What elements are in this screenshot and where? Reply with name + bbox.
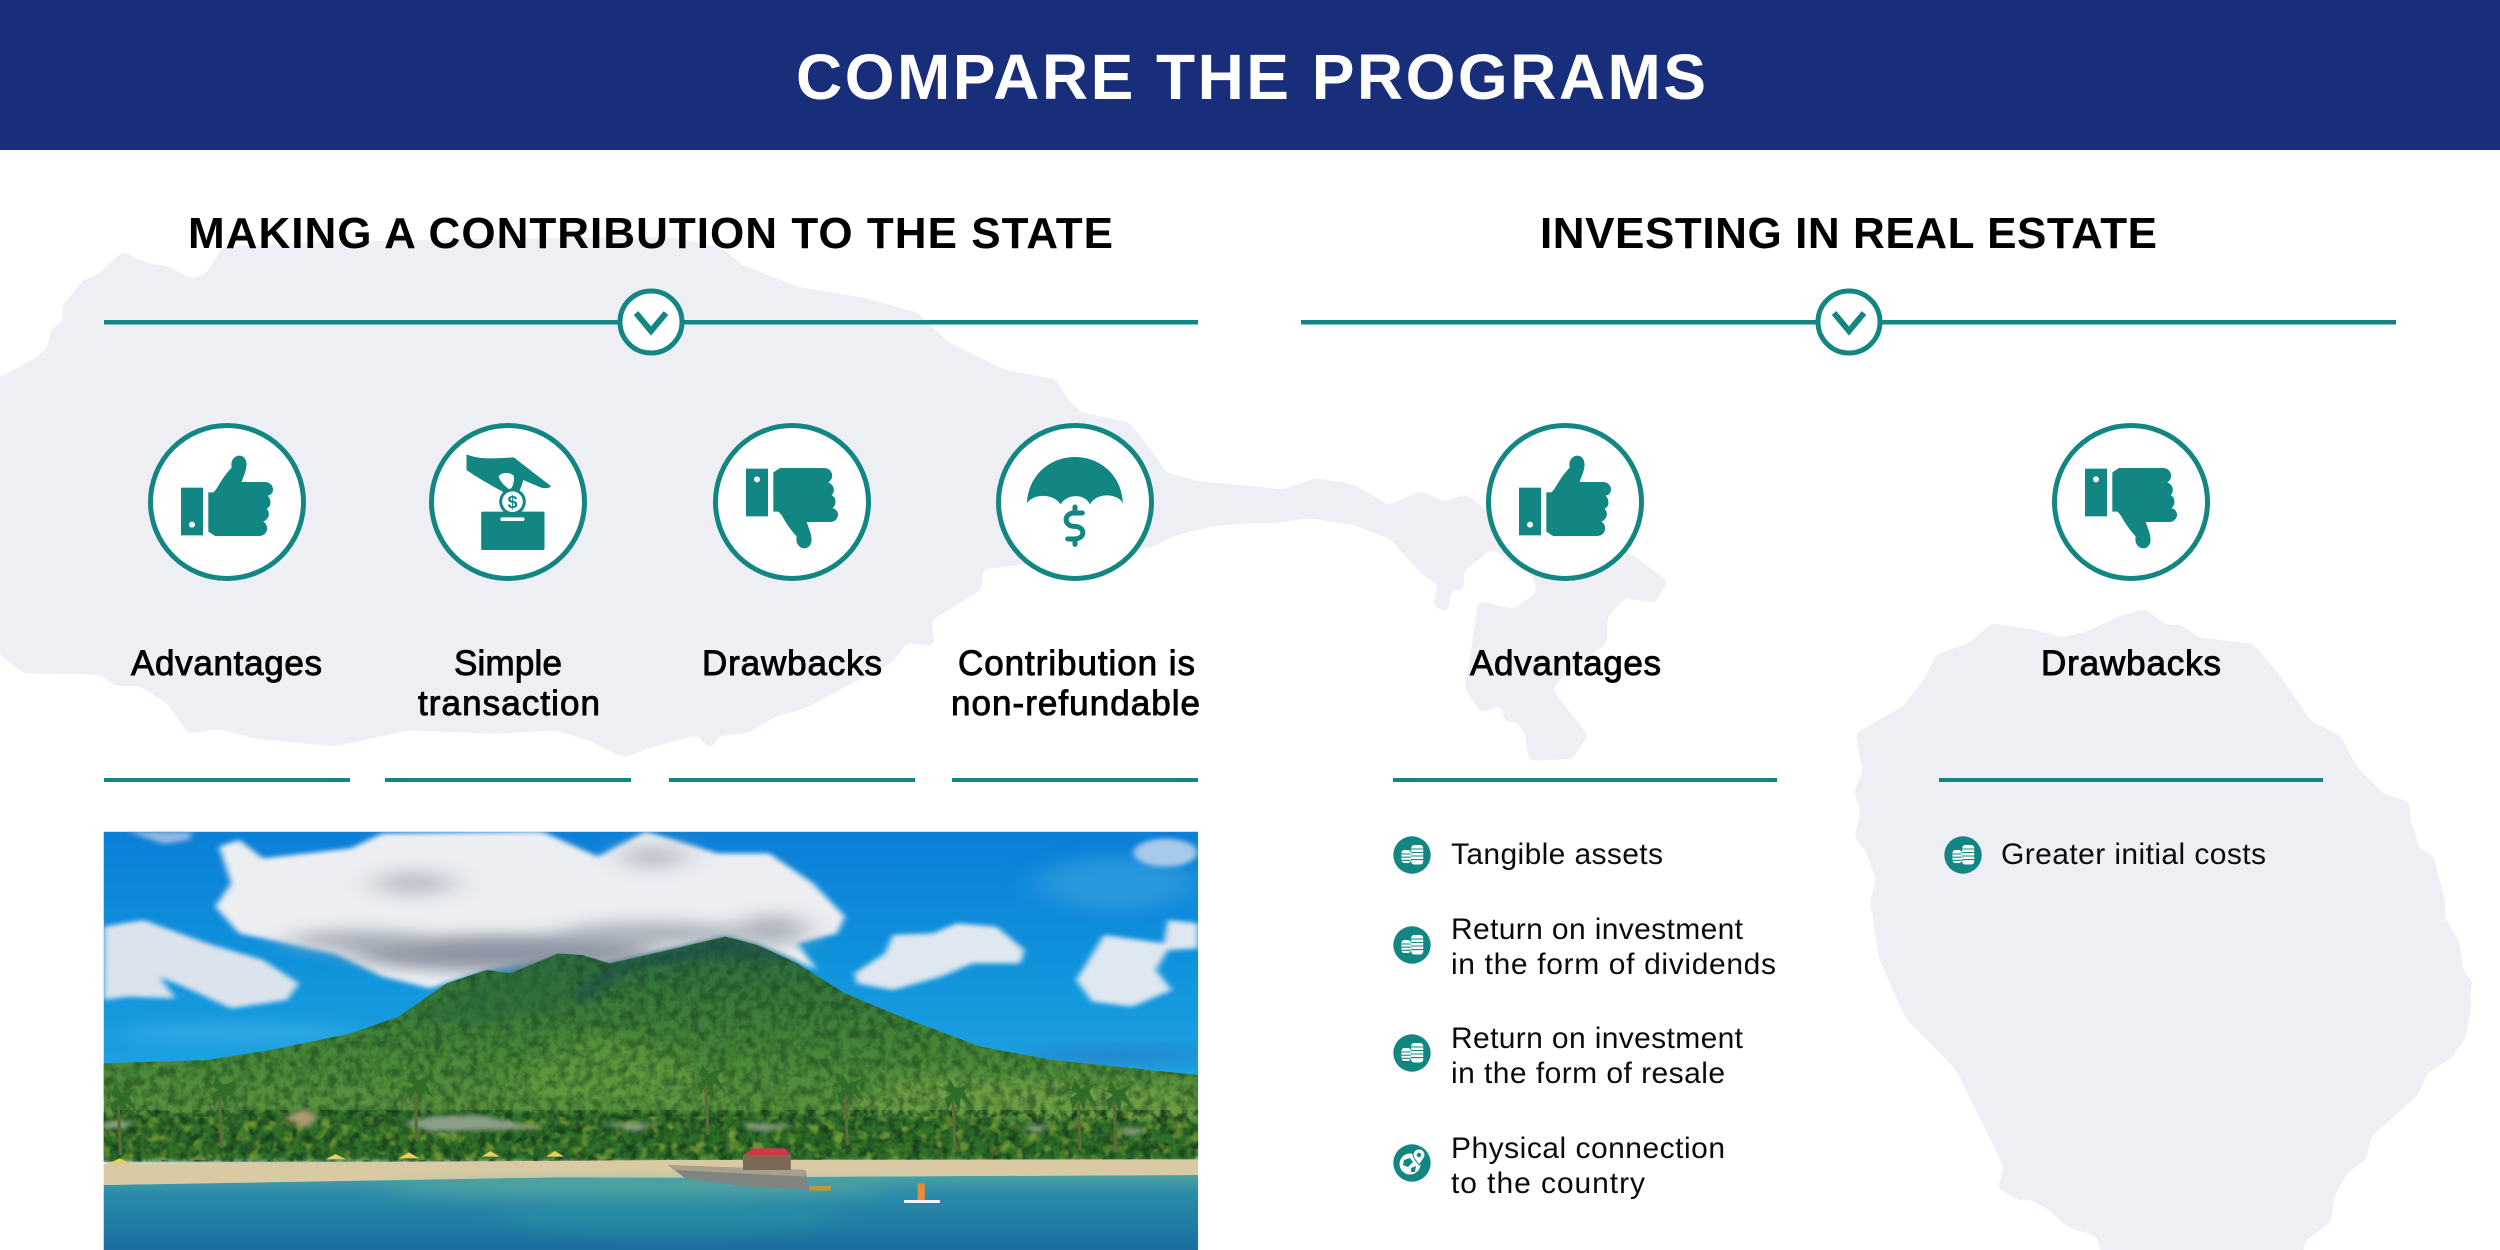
map: Nevis: [1854, 609, 2473, 1250]
label: contribution is non-refundable: Contribution is: [958, 644, 1195, 683]
label: advantages: Advantages: [131, 644, 322, 683]
item: physical connection: [1393, 1132, 1725, 1200]
item: tangible assets: Tangible assets: [1451, 838, 1663, 871]
item: return as resale: [1393, 1022, 1744, 1090]
item: return as dividends: [1393, 913, 1776, 981]
column underlines: [104, 778, 1198, 782]
item: return as dividends: Return on investment: [1451, 913, 1744, 946]
item: return as dividends: in the form of dividends: [1451, 948, 1776, 981]
item: return as resale: in the form of resale: [1451, 1057, 1725, 1090]
header banner: [0, 0, 2500, 150]
icon: umbrella over dollar: [998, 426, 1152, 578]
heading: contribution: MAKING A CONTRIBUTION TO THE STATE: [188, 209, 1113, 258]
panel: making a contribution to the state: [99, 209, 1212, 1250]
icon: hand dropping coin in box: $: [507, 492, 518, 512]
label: advantages: Advantages: [1470, 644, 1661, 683]
item: physical connection: Physical connection: [1451, 1132, 1725, 1165]
label: simple transaction: transaction: [418, 684, 600, 723]
icon: thumbs down: [716, 426, 868, 578]
map: St. Kitts: [0, 238, 1668, 761]
label: drawbacks: Drawbacks: [2041, 644, 2221, 683]
item: return as resale: Return on investment: [1451, 1022, 1744, 1055]
label: contribution is non-refundable: non-refundable: [951, 684, 1200, 723]
icon: thumbs down: [2054, 426, 2208, 578]
icon: thumbs up: [1488, 426, 1642, 578]
panel: investing in real estate: [1301, 209, 2396, 1200]
item: tangible assets: [1393, 836, 1663, 874]
icon: hand dropping coin in box: [432, 426, 584, 578]
icon: thumbs up: [150, 426, 304, 578]
item: physical connection: to the country: [1451, 1167, 1645, 1200]
label: drawbacks: Drawbacks: [702, 644, 882, 683]
list: advantages: [1393, 836, 1776, 1200]
title: COMPARE THE PROGRAMS: [796, 41, 1706, 113]
divider with chevron: [104, 291, 1198, 353]
column underlines: [1393, 778, 2323, 782]
divider with chevron: [1301, 291, 2396, 353]
item: greater initial costs: Greater initial costs: [2001, 838, 2266, 871]
label: simple transaction: [418, 644, 600, 723]
list: drawbacks: [1944, 836, 2266, 874]
label: contribution is non-refundable: [951, 644, 1200, 723]
photo: Nevis Peak and beach: [99, 832, 1212, 1250]
label: simple transaction: Simple: [454, 644, 562, 683]
heading: real estate: INVESTING IN REAL ESTATE: [1540, 209, 2157, 258]
